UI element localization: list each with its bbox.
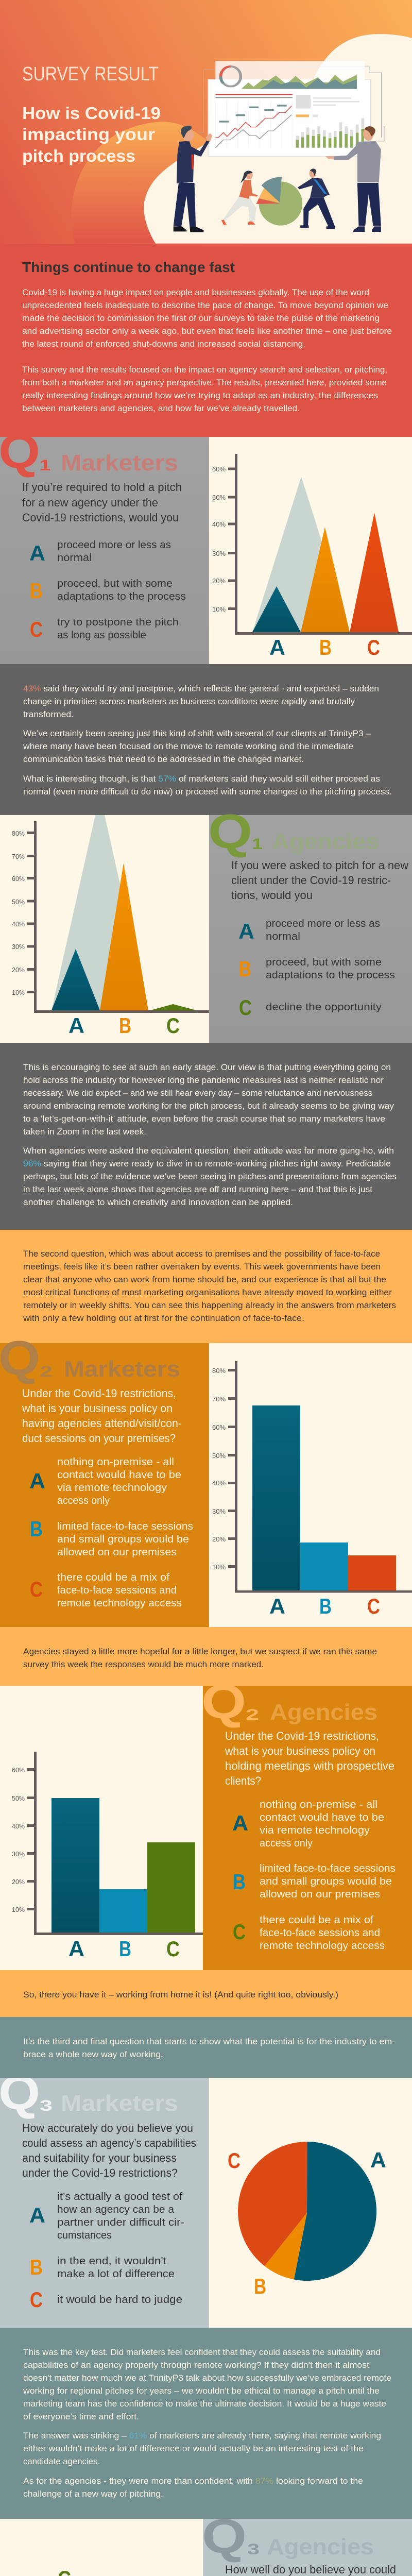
panel: Q3 commentary: candidate agencies. (23, 2456, 100, 2466)
title: How is Covid-19 (22, 104, 161, 123)
panel: Q1 agencies commentary: taken in Zoom in the last week. (23, 1127, 146, 1137)
answers: make a lot of difference (57, 2268, 175, 2280)
answers: remote technology access (57, 1598, 182, 1609)
panel: Q3 commentary: challenge of a new way of pitching. (23, 2489, 163, 2499)
text: question: Covid-19 restrictions, would you (22, 511, 179, 524)
panel: Q3 marketers (0, 2065, 209, 2328)
panel: working from home note (0, 1970, 412, 2017)
answers: B (30, 2255, 43, 2279)
chart: Q2 agencies bars: C (166, 1937, 180, 1961)
heading: Q1 agencies (208, 804, 379, 858)
text: question (231, 859, 408, 902)
answers: remote technology access (260, 1940, 385, 1952)
title (22, 104, 161, 165)
chart: Q1 marketers triangles: 30% (212, 550, 226, 557)
panel: Q2 commentary: Agencies stayed a little more hopeful for a little longer, but we suspect if we ran this same (23, 1647, 377, 1656)
answers: access only (57, 1495, 110, 1506)
chart: Q2 marketers bars: 60% (212, 1423, 226, 1431)
chart: Q1 marketers triangles: B (319, 635, 332, 659)
panel: Q1 agencies commentary: another challenge to which creativity and innovation can be applied. (23, 1197, 293, 1207)
panel: Q2 commentary (0, 1627, 412, 1686)
chart: Q1 agencies triangles: 20% (12, 966, 25, 974)
chart: Q2 agencies bars: 20% (12, 1878, 25, 1886)
chart: Q1 marketers triangles: 10% (212, 605, 226, 613)
heading: things continue to change fast: Things continue to change fast (22, 259, 235, 275)
title: pitch process (22, 146, 135, 165)
heading: Q2 marketers (0, 1331, 180, 1385)
answers: C (30, 1577, 43, 1601)
heading: Q2 marketers: Marketers (64, 1357, 180, 1382)
answers: B (233, 1870, 246, 1894)
panel: Q1 agencies commentary (0, 1043, 412, 1230)
panel: Q3 commentary: This was the key test. Did marketers feel confident that they could assess the suitability and (23, 2347, 381, 2357)
answers: A (29, 541, 45, 565)
heading: Q3 agencies: Q (202, 2509, 247, 2563)
panel: Q1 marketers commentary: transformed. (23, 709, 74, 719)
text: question: duct sessions on your premises? (22, 1432, 176, 1445)
panel: Q1 marketers commentary (0, 664, 412, 815)
answers: face-to-face sessions and (57, 1585, 177, 1596)
text: intro paragraphs: made the decision to commission the first of our surveys to take the pulse of the marketing (22, 313, 380, 323)
answers: proceed, but with some (266, 957, 382, 968)
panel: Q1 marketers commentary: change in priorities across marketers as business conditions were rapidly and brutally (23, 697, 355, 706)
chart: Q1 agencies triangles: 40% (12, 920, 25, 928)
panel: Q3 agencies (202, 2509, 412, 2576)
text: intro paragraphs: Covid-19 is having a huge impact on people and businesses globally. The use of the word (22, 287, 369, 297)
heading: Q3 agencies: 3 (247, 2541, 260, 2558)
panel: Q1 marketers commentary: 43% said they would try and postpone, which reflects the general - and expected – sudden (23, 684, 379, 693)
text: question (22, 1387, 182, 1445)
panel: Q1 agencies commentary: around embracing remote working for the pitch process, but it already seems to be giving way (23, 1101, 394, 1111)
answers: B (239, 957, 251, 981)
panel: third question intro (0, 2017, 412, 2078)
text: question: what is your business policy on (22, 1402, 173, 1415)
chart: Q1 agencies triangles: 30% (12, 943, 25, 951)
answers (238, 918, 395, 1020)
chart: Q1 marketers triangles: 20% (212, 577, 226, 585)
text: question (22, 481, 182, 524)
heading: Q2 agencies (201, 1674, 377, 1728)
answers: via remote technology (260, 1825, 370, 1836)
answers: contact would have to be (57, 1469, 181, 1481)
answers: adaptations to the process (57, 591, 186, 602)
answers: C (239, 995, 252, 1020)
text: question: How accurately do you believe you (22, 2122, 193, 2134)
text: question: and suitability for your business (22, 2151, 177, 2164)
answers: allowed on our premises (260, 1889, 380, 1900)
panel: intro (0, 244, 412, 437)
answers: adaptations to the process (266, 970, 395, 981)
chart: Q1 agencies triangles: 70% (12, 853, 25, 860)
chart: Q1 agencies triangles: 50% (12, 898, 25, 906)
figure: pie chart and two colleagues (221, 168, 335, 229)
panel: Q1 marketers (0, 424, 209, 664)
chart: Q1 marketers triangles: C (367, 635, 380, 659)
panel: Q2 marketers (0, 1331, 209, 1627)
text: question: If you were asked to pitch for a new (231, 859, 408, 872)
chart: Q2 marketers bars: 10% (212, 1563, 226, 1571)
answers: limited face-to-face sessions (57, 1521, 193, 1532)
answers: it’s actually a good test of (57, 2191, 182, 2202)
chart: Q1 agencies triangles: 60% (12, 875, 25, 883)
panel: Q3 commentary: capabilities of an agency properly through remote working? If they didn't then it almost (23, 2360, 369, 2370)
text: question: what is your business policy on (225, 1744, 375, 1757)
chart: Q1 marketers triangles: A (269, 635, 285, 659)
answers: proceed more or less as (57, 539, 171, 551)
answers (29, 539, 186, 641)
heading: Q1 agencies: 1 (252, 836, 263, 853)
panel: Q1 marketers commentary: normal (even more difficult to do now) or proceed with some changes to the pitching process. (23, 787, 392, 796)
panel: second question intro: remotely or in weekly shifts. You can see this happening already in the answers from marketers (23, 1300, 396, 1310)
panel: Q3 commentary: The answer was striking – 61% of marketers are already there, saying that remote working (23, 2431, 381, 2441)
heading: Q2 agencies: Agencies (270, 1700, 377, 1725)
panel: Q1 marketers commentary: What is interesting though, is that 57% of marketers said they would still either proceed as (23, 774, 380, 784)
chart: Q1 marketers triangles (209, 437, 412, 664)
answers: nothing on-premise - all (57, 1456, 174, 1468)
panel: third question intro: It’s the third and final question that starts to show what the potential is for the industry to em- (23, 2037, 395, 2046)
panel: Q1 agencies commentary: 96% saying that they were ready to dive in to remote-working pitches right away. Predictable (23, 1159, 391, 1168)
answers: cumstances (57, 2230, 112, 2241)
heading: Q3 marketers: 3 (40, 2097, 53, 2114)
text: intro paragraphs: unprecedented feels inadequate to describe the pace of change. To move beyond opinion we (22, 300, 388, 310)
panel: second question intro: meetings, feels like it’s been rather overtaken by events. This week governments have been (23, 1262, 381, 1272)
text: question: under the Covid-19 restrictions? (22, 2166, 178, 2179)
chart: Q2 marketers bars: 50% (212, 1452, 226, 1460)
text: question: clients? (225, 1774, 261, 1787)
text: question: holding meetings with prospective (225, 1759, 394, 1772)
chart: Q2 marketers bars: A (269, 1594, 285, 1618)
panel: Q1 agencies commentary: hold across the industry for however long the pandemic measures last is neither realistic nor (23, 1075, 384, 1085)
heading: Q2 agencies: 2 (246, 1706, 259, 1723)
title: impacting your (22, 125, 155, 144)
chart: Q1 agencies triangles: B (119, 1013, 131, 1038)
answers: decline the opportunity (266, 1002, 382, 1013)
illustration: business team with charts (71, 34, 412, 244)
heading: Q3 marketers: Marketers (61, 2091, 178, 2116)
chart: Q2 agencies bars: 30% (12, 1850, 25, 1858)
panel: second question intro: most critical functions of most marketing organisations have already moved to working either (23, 1287, 392, 1297)
heading: Q2 agencies: Q (201, 1674, 246, 1728)
text: intro paragraphs (22, 287, 392, 413)
answers: A (232, 1811, 248, 1835)
chart: Q2 marketers bars: 20% (212, 1535, 226, 1543)
heading: Q3 marketers (0, 2065, 178, 2120)
chart: Q2 marketers bars: 30% (212, 1507, 226, 1515)
text: intro paragraphs: the latest round of enforced shut-downs and increased social distancing. (22, 339, 305, 349)
chart: Q2 marketers bars: 80% (212, 1367, 226, 1375)
panel: second question intro: clear that anyone who can work from home should be, and our experience is that all but the (23, 1275, 386, 1284)
answers: try to postpone the pitch (57, 617, 179, 628)
header panel (0, 0, 412, 244)
answers: proceed more or less as (266, 918, 380, 929)
chart: Q3 marketers pie: C (228, 2148, 241, 2173)
panel: Q3 commentary: marketing team has the confidence to make the ultimate decision. It would be a huge waste (23, 2399, 386, 2409)
answers: normal (266, 931, 300, 942)
chart: Q1 agencies triangles: 80% (12, 829, 25, 837)
chart: Q2 marketers bars: 40% (212, 1479, 226, 1487)
panel: Q1 agencies commentary: When agencies were asked the equivalent question, their attitude was far more gung-ho, with (23, 1146, 394, 1156)
text: intro paragraphs: really interesting findings around how we’re trying to adapt as an industry, the differences (22, 391, 378, 400)
answers: in the end, it wouldn't (57, 2256, 166, 2267)
answers: as long as possible (57, 630, 146, 641)
text: question: for a new agency under the (22, 496, 158, 509)
figure: man at right (325, 126, 381, 232)
text: question (225, 1730, 394, 1787)
text: question (22, 2122, 196, 2179)
text: question: If you’re required to hold a pitch (22, 481, 182, 494)
answers: partner under difficult cir- (57, 2217, 184, 2228)
chart: Q1 marketers triangles: 40% (212, 520, 226, 528)
text: intro paragraphs: between marketers and agencies, and how far we’ve already travelled. (22, 403, 300, 413)
chart: Q1 agencies triangles (12, 815, 209, 1033)
answers: and small groups would be (57, 1534, 189, 1545)
chart: Q1 marketers triangles: 50% (212, 494, 226, 501)
answers (232, 1799, 396, 1952)
answers: there could be a mix of (260, 1914, 373, 1926)
chart: Q2 agencies bars (0, 1686, 203, 1970)
chart: Q3 agencies pie (0, 2519, 203, 2576)
answers: A (238, 919, 254, 943)
text: question: tions, would you (231, 889, 313, 902)
chart: Q2 agencies bars: 50% (12, 1794, 25, 1802)
text: question: client under the Covid-19 restric- (231, 874, 391, 887)
heading: Q1 agencies: Q (208, 804, 252, 858)
panel: Q1 agencies commentary: to a ‘let’s-get-on-with-it’ attitude, even before the crash course that so many marketers have (23, 1114, 385, 1124)
answers: B (30, 579, 43, 603)
figure: man at left (174, 126, 212, 232)
answers: C (30, 2287, 43, 2312)
panel: Q2 commentary: survey this week the responses would be much more marked. (23, 1659, 264, 1669)
answers: it would be hard to judge (57, 2294, 182, 2306)
answers: C (233, 1920, 246, 1944)
chart: Q2 agencies bars: 60% (12, 1766, 25, 1774)
chart: Q3 marketers pie: A (370, 2148, 386, 2172)
panel: Q3 commentary: As for the agencies - they were more than confident, with 87% looking forward to the (23, 2476, 363, 2486)
panel: working from home note: So, there you have it – working from home it is! (And quite right too, obviously.) (23, 1990, 338, 1999)
panel: second question intro (0, 1230, 412, 1343)
answers: normal (57, 552, 92, 564)
chart: Q2 marketers bars: B (319, 1594, 332, 1618)
text: question: could assess an agency’s capabilities (22, 2137, 196, 2149)
answers (29, 2191, 184, 2312)
chart: Q2 marketers bars (209, 1343, 412, 1627)
panel: Q2 agencies (201, 1674, 412, 1970)
panel: Q1 marketers commentary: where many have been focused on the move to remote working and the immediate (23, 741, 353, 751)
chart: Q1 agencies triangles: 10% (12, 989, 25, 996)
heading: Q1 marketers: 1 (40, 457, 50, 474)
panel: Q1 agencies commentary: necessary. We did expect – and we still hear every day – some reluctance and nervousness (23, 1088, 372, 1098)
answers: B (30, 1517, 43, 1541)
panel: Q1 agencies commentary: perhaps, but lots of the evidence we’ve been seeing in pitches and presentations from agencies (23, 1172, 397, 1181)
chart: Q2 agencies bars: B (119, 1937, 131, 1961)
chart: Q2 agencies bars: 10% (12, 1906, 25, 1913)
chart: Q2 agencies bars: 40% (12, 1822, 25, 1830)
chart: Q1 marketers triangles: 60% (212, 465, 226, 473)
chart: Q1 agencies triangles: C (166, 1013, 180, 1038)
answers: allowed on our premises (57, 1547, 177, 1558)
heading: Q2 marketers: 2 (40, 1363, 53, 1380)
answers: access only (260, 1838, 313, 1849)
answers: A (29, 2203, 45, 2227)
panel: Q3 commentary: doesn't matter how much we at TrinityP3 talk about how successfully we’ve embraced remote (23, 2373, 391, 2383)
chart: Q1 agencies triangles: A (68, 1013, 84, 1038)
panel: third question intro: brace a whole new way of working. (23, 2049, 163, 2059)
chart: Q2 marketers bars: C (367, 1594, 380, 1618)
panel: second question intro: with only a few holding out at first for the continuation of face-to-face. (23, 1313, 304, 1323)
answers (29, 1456, 193, 1609)
panel: Q3 commentary: working for regional pitches for years – we wouldn't be ethical to manage a pitch until the (23, 2386, 380, 2396)
text: question: having agencies attend/visit/con- (22, 1417, 182, 1430)
text: intro paragraphs: from both a marketer and an agency perspective. The results, presented here, provided some (22, 378, 387, 387)
panel: Q1 agencies commentary: in the last week alone shows that agencies are off and running here – and that this is just (23, 1184, 372, 1194)
heading: Q3 agencies (202, 2509, 374, 2563)
answers: face-to-face sessions and (260, 1927, 380, 1939)
answers: via remote technology (57, 1482, 167, 1494)
answers: A (29, 1469, 45, 1493)
answers: nothing on-premise - all (260, 1799, 377, 1810)
chart: Q3 marketers pie: B (254, 2274, 266, 2298)
heading: Q1 marketers: Marketers (61, 450, 178, 476)
answers: contact would have to be (260, 1812, 384, 1823)
chart: Q2 agencies bars: A (68, 1937, 84, 1961)
label: survey result: SURVEY RESULT (22, 63, 159, 85)
text: intro paragraphs: and advertising sector only a week ago, but even that feels like another time – one just before (22, 326, 392, 336)
panel: Q1 agencies (208, 804, 412, 1043)
answers: how an agency can be a (57, 2204, 175, 2215)
heading: Q1 agencies: Agencies (272, 829, 379, 854)
answers: proceed, but with some (57, 578, 173, 589)
panel: Q3 commentary (0, 2328, 412, 2519)
text: question: Under the Covid-19 restrictions, (225, 1730, 379, 1742)
answers: limited face-to-face sessions (260, 1863, 396, 1874)
answers: C (30, 617, 43, 641)
panel: Q3 commentary: either wouldn't make a lot of difference or would actually be an interesting test of the (23, 2444, 364, 2453)
chart: Q3 marketers pie (209, 2078, 412, 2328)
chart: Q2 marketers bars: 70% (212, 1395, 226, 1403)
panel: Q1 agencies commentary: This is encouraging to see at such an early stage. Our view is that putting everything going on (23, 1062, 391, 1072)
heading: Q3 agencies: Agencies (267, 2534, 374, 2560)
panel: Q1 marketers commentary: We’ve certainly been seeing just this kind of shift with several of our clients at TrinityP3 – (23, 728, 371, 738)
answers: there could be a mix of (57, 1572, 169, 1583)
text: question: Under the Covid-19 restrictions, (22, 1387, 176, 1400)
text: question: How well do you believe you could (225, 2563, 396, 2576)
panel: Q3 commentary: of everyone’s time and effort. (23, 2412, 139, 2421)
text: intro paragraphs: This survey and the results focused on the impact on agency search and selection, or pitching, (22, 365, 387, 375)
panel: second question intro: The second question, which was about access to premises and the possibility of face-to-face (23, 1249, 380, 1259)
panel: Q1 marketers commentary: communication tasks that need to be addressed in the changed market. (23, 754, 304, 764)
answers: and small groups would be (260, 1876, 392, 1887)
